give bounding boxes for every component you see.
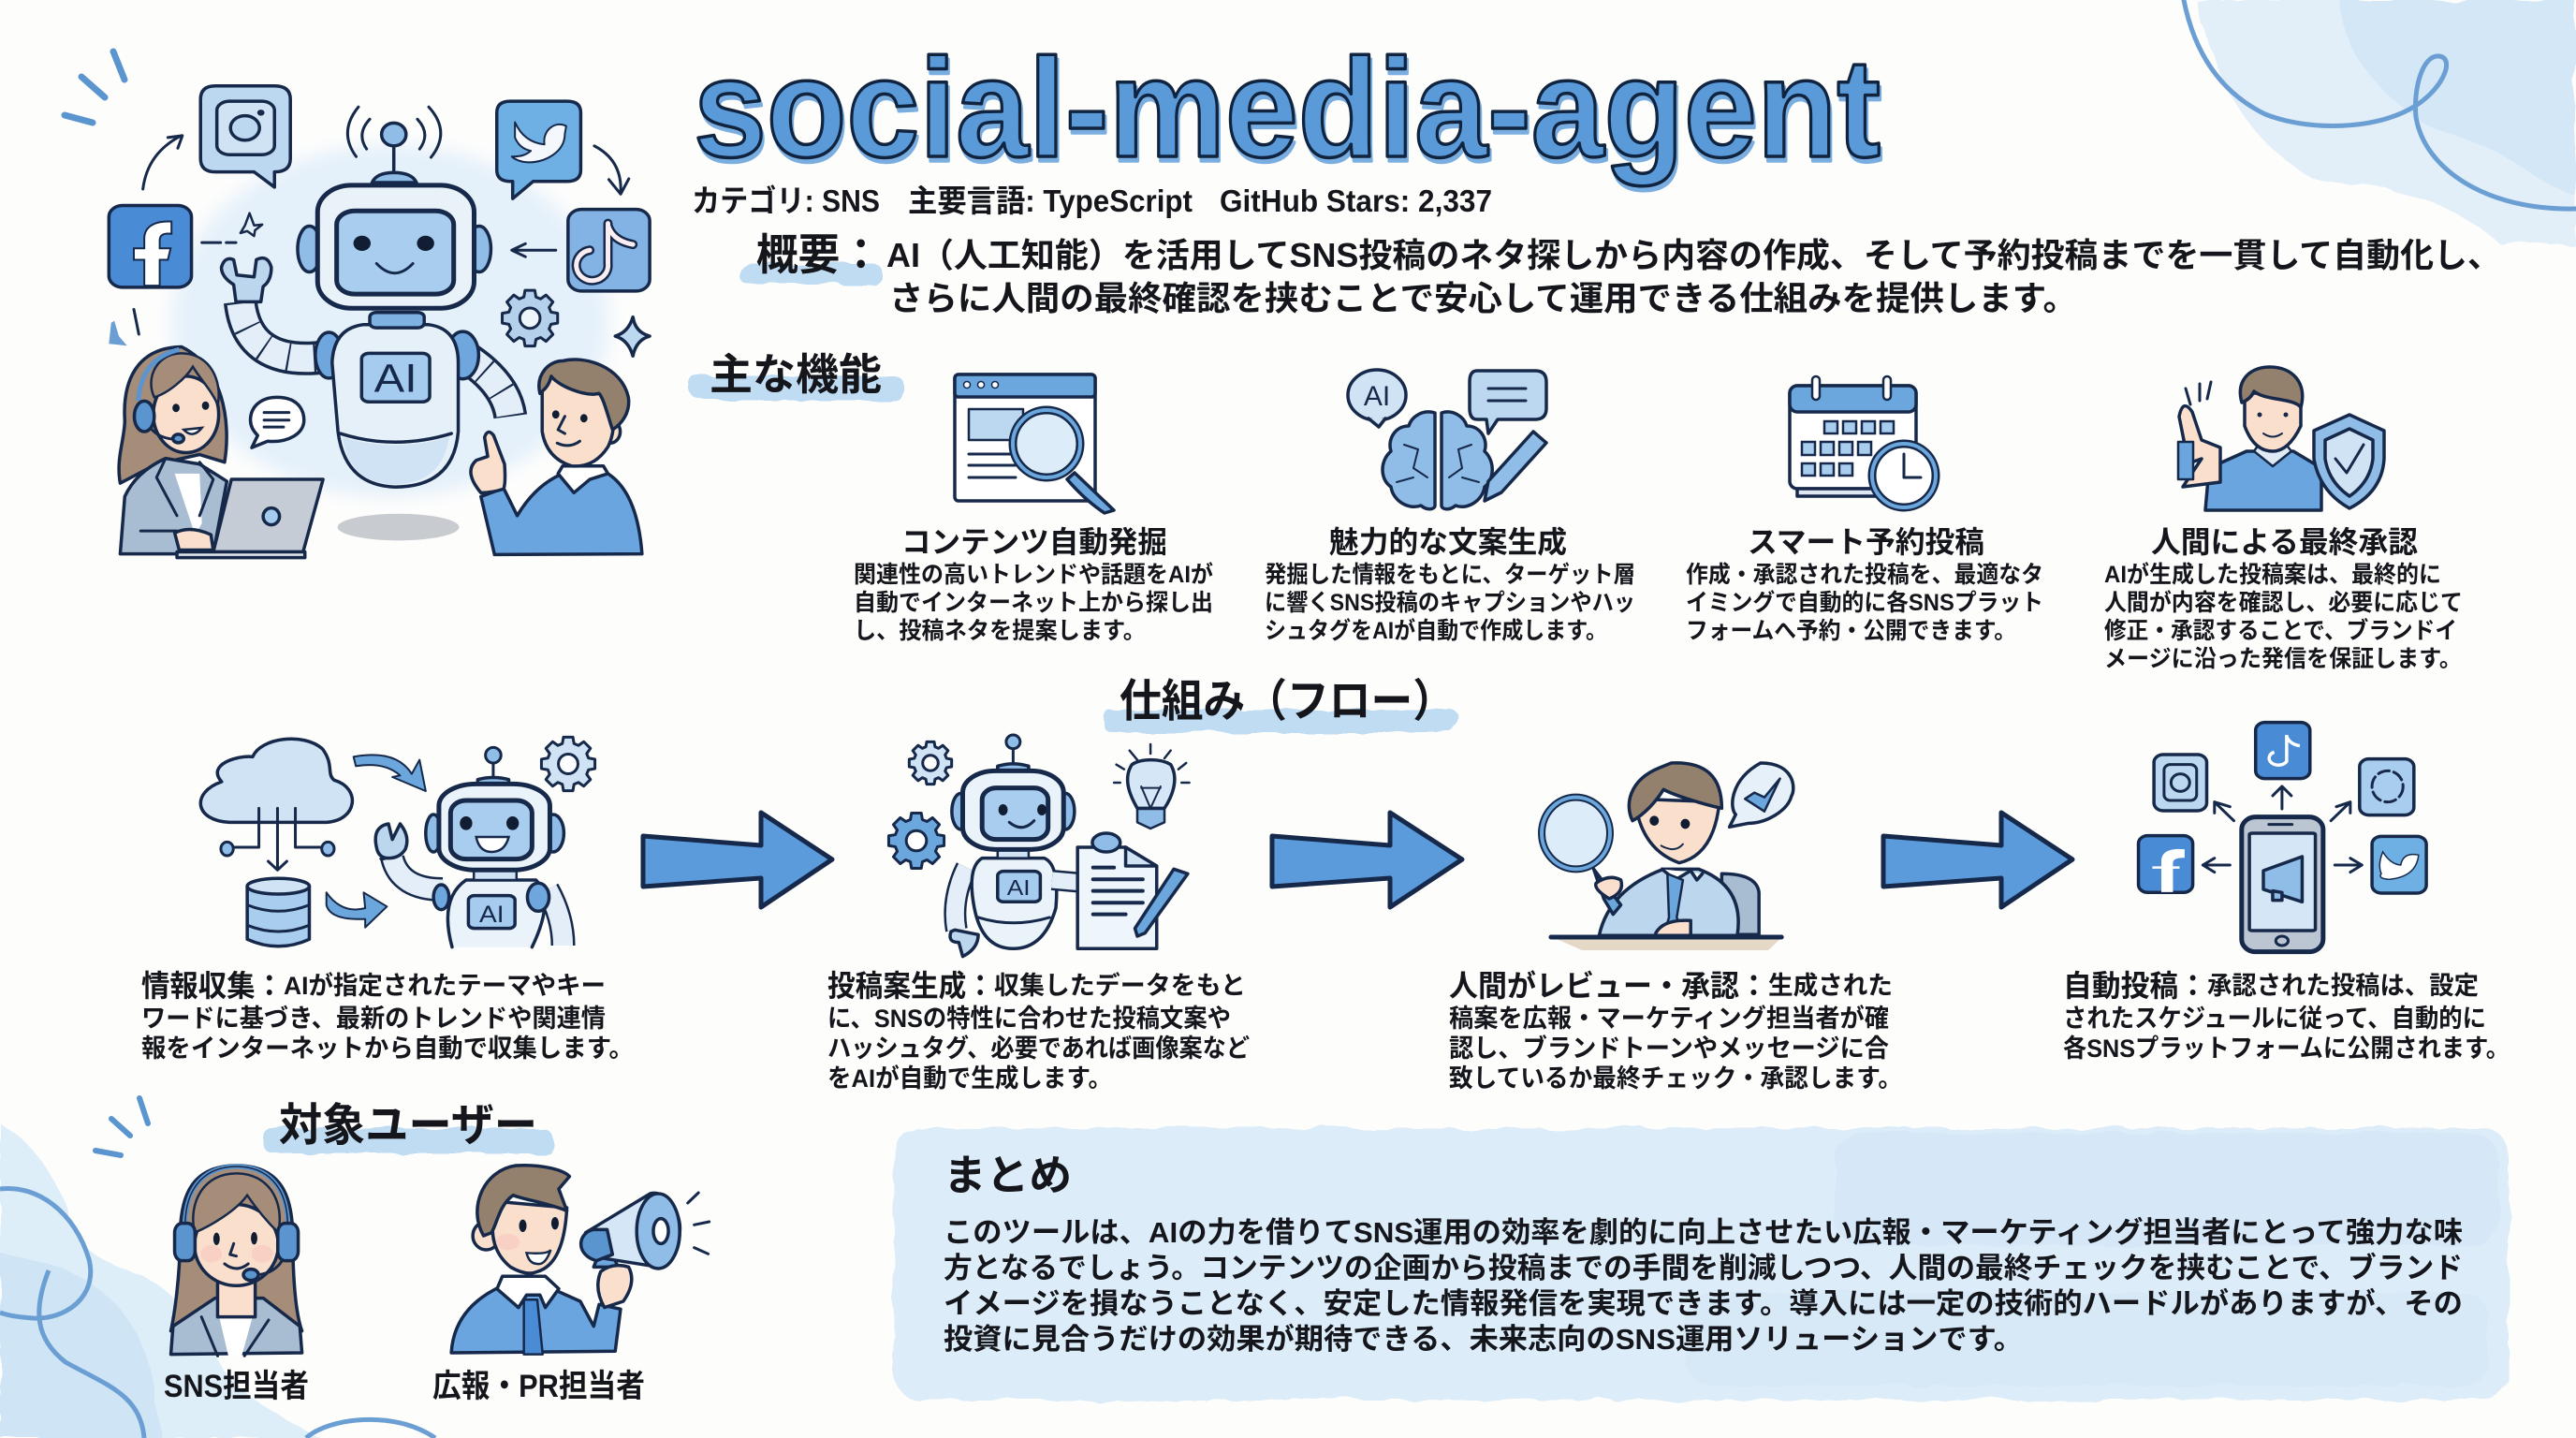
icon: cloud, database and robot bbox=[200, 739, 426, 946]
icon: man with thumbs up and shield bbox=[2178, 367, 2384, 510]
feature description: 発掘した情報をもとに、ターゲット層 bbox=[1265, 562, 1635, 588]
step text: 稿案を広報・マーケティング担当者が確 bbox=[1449, 1004, 1889, 1033]
flow step 2: draft generation bbox=[827, 735, 1250, 1093]
feature description: フォームへ予約・公開できます。 bbox=[1686, 618, 2016, 644]
heading: how it works: 仕組み（フロー） bbox=[1120, 677, 1455, 726]
overview: さらに人間の最終確認を挟むことで安心して運用できる仕組みを提供します。 bbox=[889, 279, 2077, 317]
arrow 2 bbox=[1272, 813, 1462, 907]
summary text: 方となるでしょう。コンテンツの企画から投稿までの手間を削減しつつ、人間の最終チェックを挟むことで、ブランド bbox=[944, 1252, 2463, 1284]
feature: content discovery bbox=[854, 374, 1213, 644]
step text: に、SNSの特性に合わせた投稿文案や bbox=[827, 1005, 1231, 1033]
icon: robot, lightbulb and document bbox=[950, 735, 1190, 957]
feature title: スマート予約投稿 bbox=[1748, 525, 1984, 559]
decoration: spark lines bottom left bbox=[95, 1098, 148, 1155]
icon: small chat bubble bbox=[251, 397, 304, 448]
icon: brain with speech bubbles and pencil bbox=[1348, 370, 1546, 509]
step text: ワードに基づき、最新のトレンドや関連情 bbox=[141, 1005, 606, 1033]
decoration: top right watercolor bbox=[2184, 0, 2576, 245]
feature description: 修正・承認することで、ブランドイ bbox=[2104, 617, 2457, 644]
metadata line bbox=[692, 183, 1492, 218]
feature description: 人間が内容を確認し、必要に応じて bbox=[2104, 589, 2463, 616]
person: man pointing bbox=[471, 360, 642, 554]
step text bbox=[827, 969, 1250, 1093]
feature: copy generation bbox=[1265, 370, 1635, 644]
icon: calendar with clock bbox=[1790, 376, 1936, 507]
feature description: AIが生成した投稿案は、最終的に bbox=[2104, 561, 2441, 588]
feature description: 自動でインターネット上から探し出 bbox=[854, 590, 1213, 616]
decoration: bottom left watercolor bbox=[0, 1123, 435, 1438]
step text: 収集したデータをもと bbox=[994, 971, 1246, 1000]
feature description: イミングで自動的に各SNSプラット bbox=[1686, 589, 2043, 616]
heading: target users: 対象ユーザー bbox=[279, 1101, 537, 1151]
robot bbox=[222, 107, 510, 540]
step text: 人間がレビュー・承認： bbox=[1449, 969, 1768, 1003]
panel: target users bbox=[164, 1101, 710, 1404]
feature description: シュタグをAIが自動で作成します。 bbox=[1265, 617, 1607, 644]
icon: browser with magnifier bbox=[955, 374, 1114, 513]
heading: summary: まとめ bbox=[944, 1152, 1072, 1199]
step text: 自動投稿： bbox=[2063, 969, 2207, 1003]
summary text: 投資に見合うだけの効果が期待できる、未来志向のSNS運用ソリューションです。 bbox=[944, 1323, 2023, 1356]
icon: robot, lightbulb and document: AI bbox=[1007, 875, 1031, 900]
step text: 認し、ブランドトーンやメッセージに合 bbox=[1449, 1034, 1889, 1063]
feature description: し、投稿ネタを提案します。 bbox=[854, 618, 1146, 644]
label: SNS manager: SNS担当者 bbox=[164, 1369, 309, 1404]
icon: twitter bubble bbox=[497, 101, 580, 198]
panel: summary bbox=[894, 1128, 2509, 1400]
flow step 3: human review bbox=[1449, 763, 1902, 1093]
icon: phone with SNS icons bbox=[2139, 723, 2426, 952]
feature description bbox=[1265, 562, 1635, 644]
overview: 概要： bbox=[756, 230, 882, 279]
decoration: spark lines top left bbox=[65, 51, 124, 123]
feature description bbox=[2104, 561, 2463, 672]
title: social-media-agent bbox=[694, 29, 1881, 186]
step text: AIが指定されたテーマやキー bbox=[284, 971, 606, 1000]
step text: 生成された bbox=[1768, 972, 1893, 1000]
hero illustration: robot, SNS icons and people bbox=[109, 86, 650, 558]
step text: されたスケジュールに従って、自動的に bbox=[2063, 1005, 2486, 1033]
arrows between SNS icons bbox=[109, 136, 629, 345]
metadata line: GitHub Stars: 2,337 bbox=[1220, 183, 1492, 218]
overview: AI（人工知能）を活用してSNS投稿のネタ探しから内容の作成、そして予約投稿までを一貫して自動化し、 bbox=[886, 236, 2501, 274]
summary text: イメージを損なうことなく、安定した情報発信を実現できます。導入には一定の技術的ハードルがありますが、その bbox=[944, 1287, 2463, 1320]
feature title: コンテンツ自動発掘 bbox=[901, 525, 1167, 559]
feature description: 関連性の高いトレンドや話題をAIが bbox=[854, 561, 1213, 588]
icon: facebook bbox=[109, 206, 192, 287]
overview bbox=[740, 230, 2501, 317]
icon: gears bbox=[888, 741, 952, 869]
step text: 致しているか最終チェック・承認します。 bbox=[1449, 1064, 1902, 1093]
flow step 4: automatic posting bbox=[2063, 723, 2510, 1063]
icon: gear bbox=[541, 737, 595, 791]
person: woman with laptop bbox=[119, 346, 323, 558]
step text bbox=[1449, 969, 1902, 1093]
icon: gear bbox=[503, 290, 558, 346]
icon: sparkle bbox=[615, 317, 650, 356]
icon: reviewer with magnifier bbox=[1542, 763, 1793, 950]
feature description bbox=[1686, 562, 2043, 644]
summary text: このツールは、AIの力を借りてSNS運用の効率を劇的に向上させたい広報・マーケティング担当者にとって強力な味 bbox=[944, 1216, 2463, 1249]
step text: 報をインターネットから自動で収集します。 bbox=[141, 1034, 634, 1063]
icon: brain with speech bubbles and pencil: AI bbox=[1364, 381, 1390, 412]
person: SNS manager bbox=[171, 1166, 302, 1356]
heading: main features: 主な機能 bbox=[710, 350, 882, 399]
feature title: 人間による最終承認 bbox=[2151, 525, 2418, 559]
icon: robot: AI bbox=[479, 902, 505, 928]
step text: をAIが自動で生成します。 bbox=[827, 1064, 1112, 1093]
arrow 3 bbox=[1883, 813, 2072, 907]
step text bbox=[2063, 969, 2510, 1063]
flow step 1: information gathering bbox=[141, 737, 634, 1063]
label: PR manager: 広報・PR担当者 bbox=[432, 1369, 645, 1404]
step text: 情報収集： bbox=[141, 969, 284, 1003]
step text bbox=[141, 969, 634, 1063]
feature description bbox=[854, 561, 1213, 644]
icon: tiktok bbox=[568, 210, 650, 291]
step text: ハッシュタグ、必要であれば画像案など bbox=[827, 1034, 1250, 1063]
person: PR manager with megaphone bbox=[451, 1166, 710, 1355]
feature title: 魅力的な文案生成 bbox=[1329, 525, 1567, 559]
metadata line: 主要言語: TypeScript bbox=[908, 183, 1193, 218]
step text: 各SNSプラットフォームに公開されます。 bbox=[2063, 1034, 2510, 1063]
feature description: メージに沿った発信を保証します。 bbox=[2104, 646, 2462, 672]
icon: instagram bubble bbox=[200, 86, 290, 187]
icon: robot bbox=[375, 747, 564, 947]
summary text bbox=[944, 1216, 2463, 1356]
feature: human approval bbox=[2104, 367, 2463, 672]
robot: AI bbox=[374, 355, 417, 401]
metadata line: カテゴリ: SNS bbox=[692, 183, 880, 218]
feature: smart scheduling bbox=[1686, 376, 2043, 644]
feature description: 作成・承認された投稿を、最適なタ bbox=[1686, 562, 2043, 588]
feature description: に響くSNS投稿のキャプションやハッ bbox=[1265, 590, 1635, 616]
step text: 投稿案生成： bbox=[827, 969, 994, 1003]
step text: 承認された投稿は、設定 bbox=[2207, 972, 2479, 1000]
arrow 1 bbox=[643, 813, 832, 907]
